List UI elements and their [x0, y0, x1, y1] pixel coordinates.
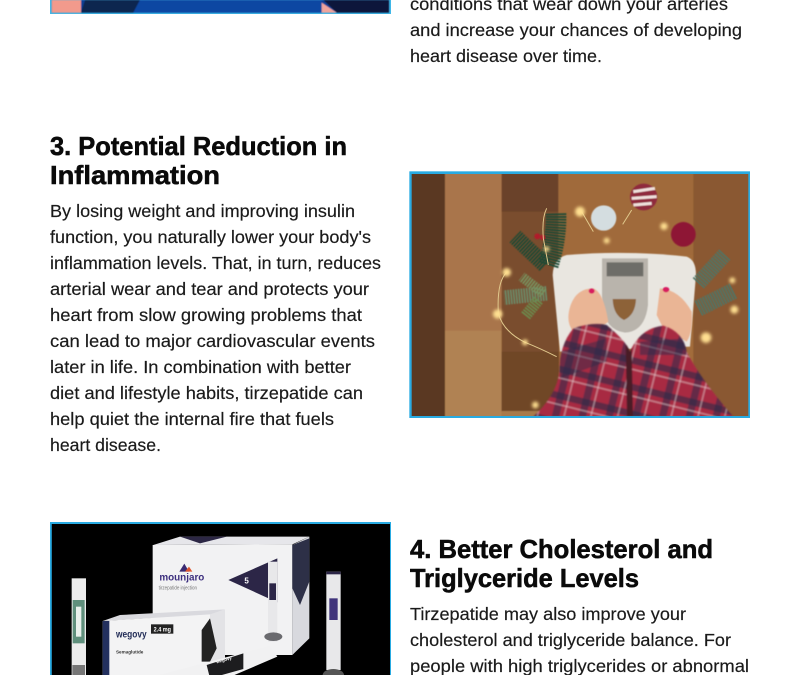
text block: section 4 paragraph: Tirzepatide may also improve your — [410, 604, 686, 624]
text block: section 3 paragraph — [50, 201, 381, 455]
photo: feet on a bathroom scale with festive decorations — [409, 171, 750, 418]
Wegovy box: wegovy — [115, 630, 147, 641]
feet — [568, 287, 692, 342]
text block: section 3 paragraph: By losing weight and improving insulin — [50, 201, 355, 221]
text block: section 3 paragraph: can lead to major cardiovascular events — [50, 331, 375, 351]
plaid pyjama legs — [533, 322, 740, 418]
white pen lying in front: wegovy — [215, 655, 233, 665]
text block: section 3 paragraph: heart from slow growing problems that — [50, 305, 362, 325]
photo: person in blue shirt (cropped top image) — [50, 0, 391, 14]
heading: section 3 — [50, 131, 347, 190]
fir sprigs — [504, 213, 733, 317]
wood floor planks — [410, 172, 750, 418]
text block: section 3 paragraph: diet and lifestyle habits, tirzepatide can — [50, 383, 363, 403]
text block: section 3 paragraph: help quiet the internal fire that fuels — [50, 409, 334, 429]
Mounjaro box: tirzepatide injection — [159, 586, 197, 592]
heading: section 3: Inflammation — [50, 160, 220, 190]
photo: Mounjaro and Wegovy boxes with pens on black background — [50, 522, 391, 675]
text block: section 4 paragraph: cholesterol and triglyceride balance. For — [410, 630, 731, 650]
fairy light glows — [493, 207, 738, 408]
text block: end of section 2 paragraph: and increase your chances of developing — [410, 20, 742, 40]
heading: section 4: 4. Better Cholesterol and — [410, 534, 713, 564]
white pen lying in front — [206, 653, 278, 675]
text block: section 3 paragraph: arterial wear and tear and protects your — [50, 279, 369, 299]
Mounjaro box: 5 — [244, 577, 249, 586]
right purple pen — [323, 572, 344, 675]
Mounjaro box — [153, 537, 309, 655]
Wegovy box: 2.4 mg — [154, 627, 171, 634]
Wegovy box — [103, 609, 225, 675]
heading: section 4: Triglyceride Levels — [410, 563, 639, 593]
fairy light string — [498, 208, 632, 357]
text block: section 3 paragraph: function, you naturally lower your body's — [50, 227, 371, 247]
Wegovy box: Semaglutide — [116, 649, 144, 655]
text block: end of section 2 paragraph: heart disease over time. — [410, 46, 602, 66]
scale body — [553, 253, 696, 352]
heading: section 3: 3. Potential Reduction in — [50, 131, 347, 161]
text block: end of section 2 paragraph — [410, 0, 742, 66]
heading: section 4 — [410, 534, 713, 593]
text block: section 4 paragraph — [410, 604, 749, 675]
baubles — [534, 184, 696, 247]
left green pen — [72, 578, 86, 675]
text block: section 3 paragraph: heart disease. — [50, 435, 161, 455]
Mounjaro box: mounjaro — [159, 573, 204, 584]
text block: section 3 paragraph: inflammation levels. That, in turn, reduces — [50, 253, 381, 273]
text block: section 3 paragraph: later in life. In combination with better — [50, 357, 351, 377]
